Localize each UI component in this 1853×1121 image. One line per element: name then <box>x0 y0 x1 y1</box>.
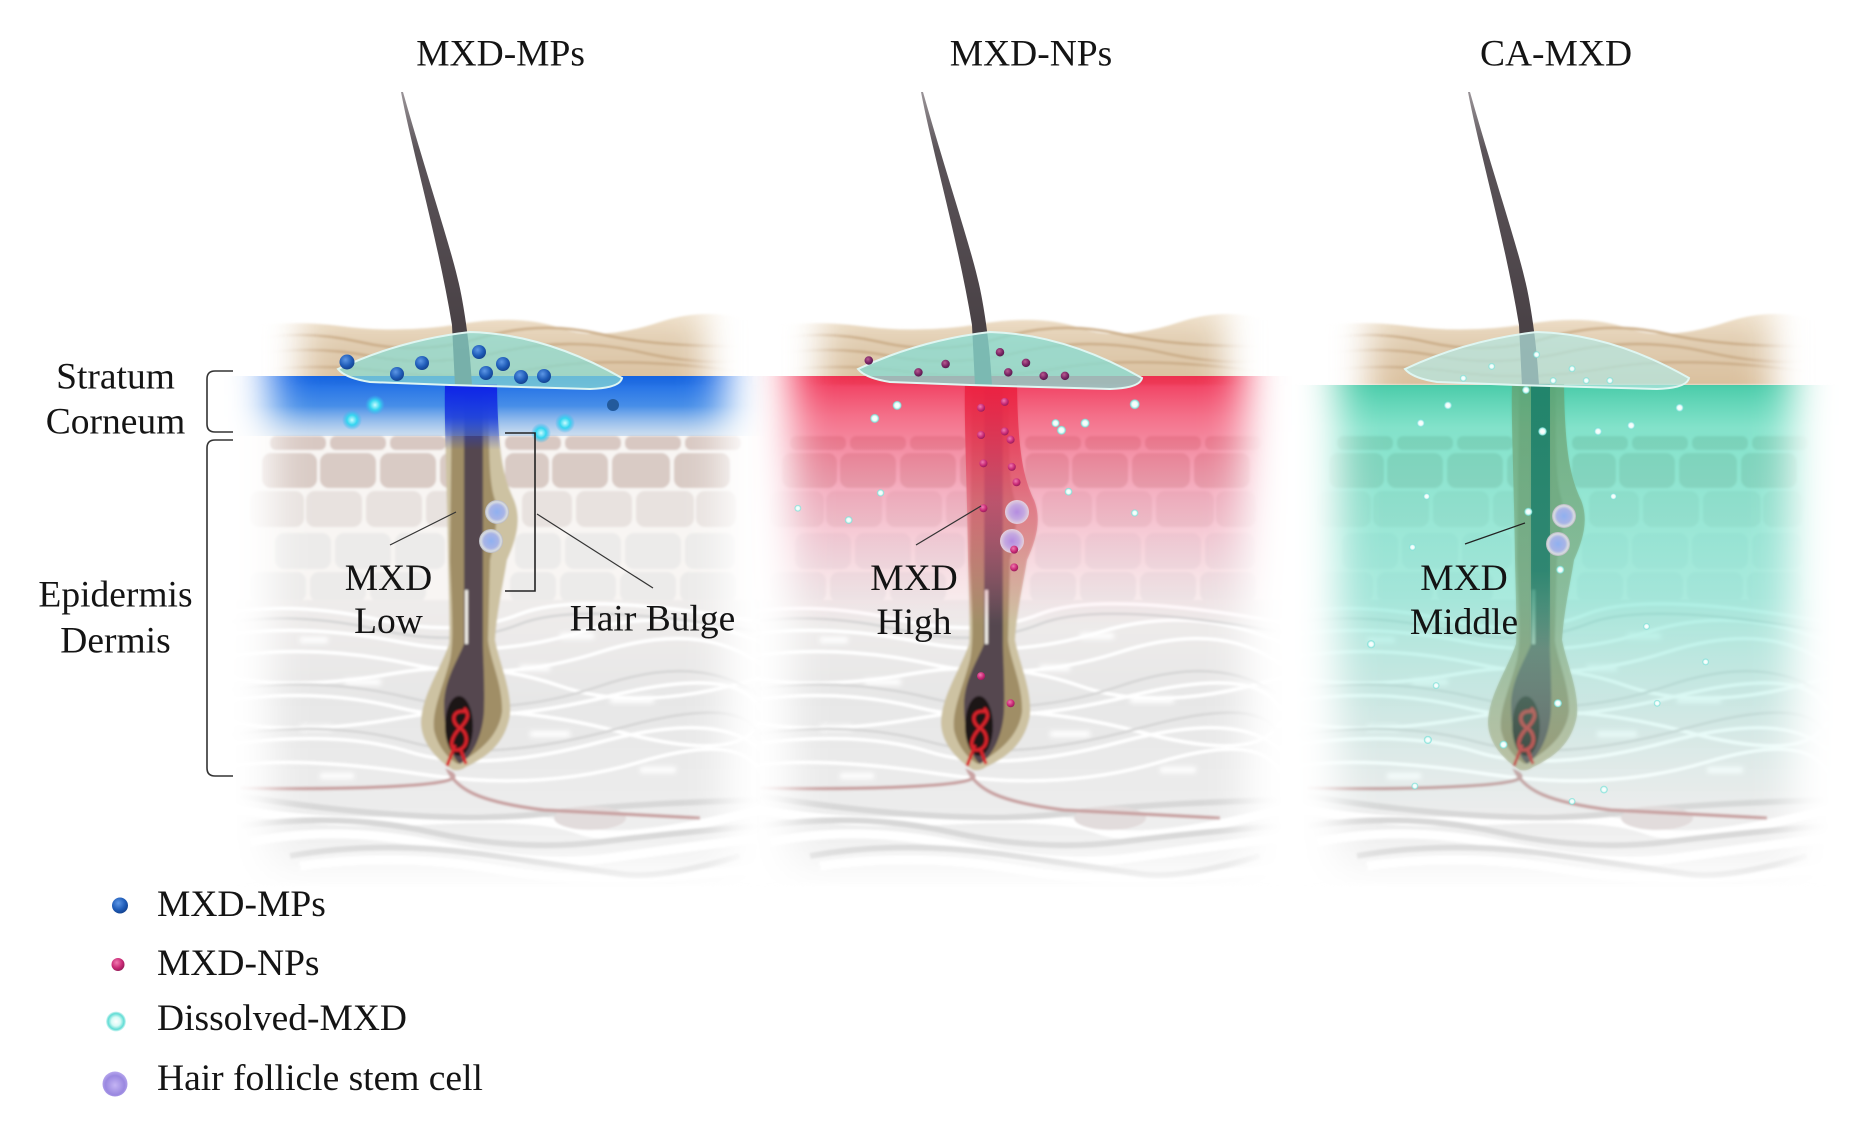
leader line: hair bulge <box>537 514 653 588</box>
drug patch <box>858 332 1142 389</box>
legend label: Hair follicle stem cell: Hair follicle stem cell <box>157 1058 483 1099</box>
legend label: MXD-NPs: MXD-NPs <box>157 943 320 984</box>
label: MXD Low: Low <box>354 601 423 642</box>
title: MXD-NPs: MXD-NPs <box>950 34 1112 74</box>
particles: MXD-MPs panel <box>340 345 619 443</box>
label: Epidermis Dermis: Dermis <box>60 620 171 662</box>
hair shaft <box>401 92 472 386</box>
panel: MXD-NPs skin section <box>740 92 1300 885</box>
stem cells, all panels <box>479 500 1576 556</box>
leader line: MXD high <box>916 506 981 545</box>
title: MXD-MPs: MXD-MPs <box>416 34 585 74</box>
bracket: hair bulge <box>505 433 535 591</box>
label: MXD High: High <box>876 602 952 643</box>
legend label: MXD-MPs: MXD-MPs <box>157 884 326 925</box>
legend icon: Dissolved-MXD <box>106 1012 126 1032</box>
label: Stratum Corneum: Corneum <box>46 402 185 442</box>
label: Hair Bulge: Hair Bulge <box>570 598 735 640</box>
hair shaft <box>921 92 992 386</box>
drug patch <box>338 332 622 389</box>
red drug distribution band <box>760 376 1276 613</box>
hair shaft <box>1468 92 1539 386</box>
legend label: Dissolved-MXD: Dissolved-MXD <box>157 998 407 1039</box>
legend <box>102 884 483 1099</box>
blue stratum corneum band <box>220 376 780 436</box>
follicle blue uptake <box>444 384 500 448</box>
drug patch <box>1405 332 1689 389</box>
leader line: MXD middle <box>1465 523 1525 544</box>
particles: CA-MXD panel <box>1367 351 1709 805</box>
legend icon: MXD-MPs <box>112 898 128 914</box>
green drug distribution band <box>1307 385 1823 782</box>
follicle red uptake <box>964 386 1038 604</box>
label: MXD High: MXD <box>870 558 958 599</box>
follicle teal shaft <box>1531 384 1550 650</box>
label: MXD Middle: MXD <box>1420 558 1508 599</box>
bracket: stratum corneum <box>207 371 233 432</box>
title: CA-MXD: CA-MXD <box>1480 34 1632 74</box>
panel: MXD-MPs skin section <box>220 92 780 885</box>
label: MXD Low: MXD <box>345 558 432 599</box>
particles: MXD-NPs panel <box>794 348 1140 707</box>
label: Epidermis Dermis: Epidermis <box>38 574 193 616</box>
label: MXD Middle: Middle <box>1410 602 1518 643</box>
bracket: epidermis and dermis <box>207 440 233 776</box>
legend icon: Hair follicle stem cell <box>102 1072 128 1096</box>
panel: CA-MXD skin section <box>1287 92 1847 885</box>
follicle olive tint <box>1488 384 1585 770</box>
label: Stratum Corneum: Stratum <box>56 356 175 398</box>
legend icon: MXD-NPs <box>112 958 124 971</box>
leader line: MXD low <box>390 512 456 545</box>
